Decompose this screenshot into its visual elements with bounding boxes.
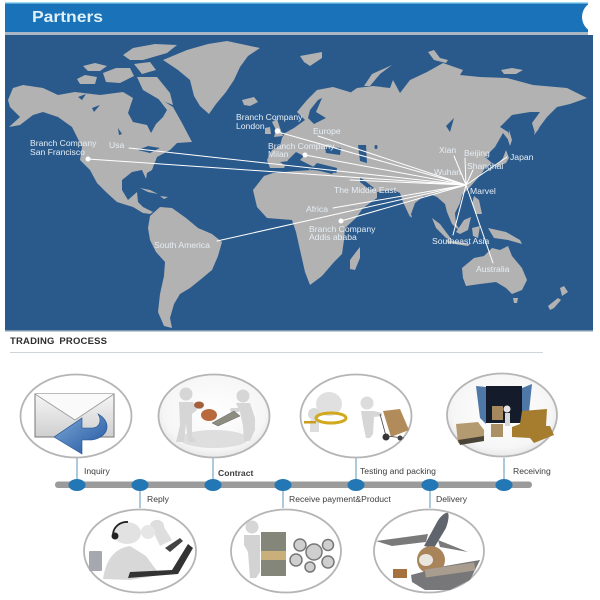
Madagascar (350, 247, 360, 270)
heading: Partners: Partners (32, 9, 103, 26)
step labels: Receiving (513, 466, 551, 476)
map: branch dots (86, 128, 344, 224)
map: land masses (8, 41, 587, 328)
map: place labels: Wuhan (434, 167, 461, 177)
map: place labels: Xian (439, 145, 456, 155)
map: place labels: Shanghai (467, 161, 503, 171)
Iceland (242, 97, 258, 106)
New Zealand (560, 286, 568, 296)
map: place labels: London (236, 121, 265, 131)
Africa (253, 170, 363, 285)
icon: testing and packing (300, 374, 412, 458)
step labels: Testing and packing (360, 466, 436, 476)
Sri Lanka (410, 214, 412, 218)
map: place labels: Australia (476, 264, 510, 274)
timeline (55, 458, 532, 508)
map: seas and lakes (78, 94, 454, 190)
icon: delivery plane, globe and ship (374, 510, 484, 592)
step labels: Receive payment&Product (289, 494, 391, 504)
step labels: Inquiry (84, 466, 110, 476)
icon: contract handshake figures (158, 374, 270, 458)
map: place labels: Usa (109, 140, 125, 150)
Greenland (163, 41, 260, 114)
step labels: Contract (218, 468, 253, 478)
Svalbard, Novaya Zemlya, Severnaya (300, 52, 322, 66)
panel: world map (5, 35, 593, 332)
South America (148, 207, 222, 328)
map: place labels (30, 112, 534, 274)
Caribbean (140, 188, 158, 194)
Philippines (472, 196, 482, 214)
icon: receive payment and product (231, 510, 341, 592)
map: place labels: Africa (306, 204, 328, 214)
map: place labels: Addis ababa (309, 232, 357, 242)
map: place labels: Branch Company (236, 112, 303, 122)
step labels: Reply (147, 494, 170, 504)
Arctic islands (123, 44, 177, 60)
icon: reply call-centre figures (84, 510, 196, 592)
UK and Ireland (272, 119, 283, 137)
map: place labels: Southeast Asia (432, 236, 490, 246)
map: place labels: Europe (313, 126, 341, 136)
Indonesia (432, 218, 452, 240)
map: place labels: Beijing (464, 148, 490, 158)
step labels: Delivery (436, 494, 468, 504)
icon: inquiry envelope with arrow (20, 374, 132, 458)
map: place labels: Branch Company (30, 138, 97, 148)
map: connection lines (88, 132, 507, 263)
North America (8, 85, 192, 214)
map: place labels: San Francisco (30, 147, 85, 157)
map: place labels: Japan (510, 152, 534, 162)
map: place labels: South America (154, 240, 210, 250)
map: place labels: Branch Company (268, 141, 335, 151)
Australia (462, 246, 527, 294)
Japan (494, 150, 509, 168)
Eurasia (267, 63, 587, 232)
map: place labels: The Middle East (334, 185, 397, 195)
header bar: Partners (5, 1, 600, 35)
map: place labels: Milan (268, 149, 289, 159)
icon: receiving container and boxes (447, 374, 557, 456)
map: place labels: Branch Company (309, 224, 376, 234)
heading: TRADING PROCESS: TRADING PROCESS (10, 336, 107, 347)
step labels (84, 466, 551, 504)
map: place labels: Marvel (470, 186, 496, 196)
